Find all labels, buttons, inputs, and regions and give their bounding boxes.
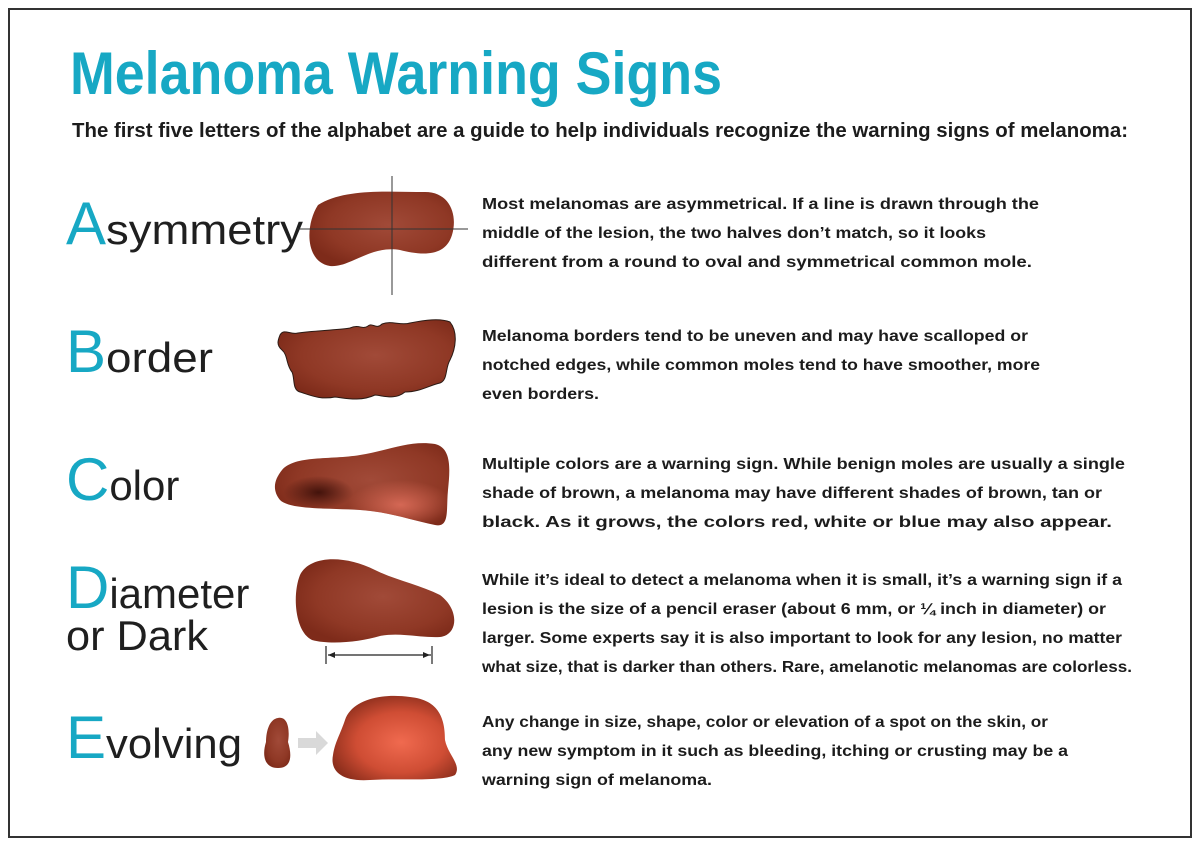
text B: even borders. bbox=[482, 386, 599, 403]
text B bbox=[482, 328, 1040, 403]
heading: Color: Color bbox=[66, 446, 179, 513]
text A: Most melanomas are asymmetrical. If a line is drawn through the bbox=[482, 196, 1039, 213]
icon: asymmetric mole with crosshair bbox=[297, 176, 468, 295]
row B: Border bbox=[66, 318, 1040, 403]
icon: mole with uneven border bbox=[278, 320, 455, 399]
text A: middle of the lesion, the two halves don’t match, so it looks bbox=[482, 225, 986, 242]
text D bbox=[481, 572, 1132, 676]
text D: While it’s ideal to detect a melanoma when it is small, it’s a warning sign if a bbox=[482, 572, 1122, 589]
row D: Diameter or Dark bbox=[66, 554, 1132, 676]
heading: Asymmetry: Asymmetry bbox=[66, 190, 303, 257]
row D: Diameter or Dark: or Dark bbox=[66, 612, 209, 659]
row C: Color bbox=[66, 443, 1125, 531]
text E: warning sign of melanoma. bbox=[481, 772, 712, 789]
text E: Any change in size, shape, color or elevation of a spot on the skin, or bbox=[482, 714, 1048, 731]
text C bbox=[482, 456, 1125, 531]
text C: Multiple colors are a warning sign. While benign moles are usually a single bbox=[482, 456, 1125, 473]
row E: Evolving bbox=[66, 696, 1068, 789]
title: Melanoma Warning Signs bbox=[70, 40, 722, 107]
icon: multicolored mole bbox=[275, 443, 449, 525]
text D: larger. Some experts say it is also important to look for any lesion, no matter bbox=[482, 630, 1122, 647]
text C: shade of brown, a melanoma may have different shades of brown, tan or bbox=[482, 485, 1102, 502]
text A: different from a round to oval and symmetrical common mole. bbox=[482, 254, 1032, 271]
icon: mole with diameter measure bbox=[296, 559, 454, 664]
text B: notched edges, while common moles tend to have smoother, more bbox=[482, 357, 1040, 374]
text C: black. As it grows, the colors red, white or blue may also appear. bbox=[482, 514, 1112, 531]
text A bbox=[482, 196, 1039, 271]
text B: Melanoma borders tend to be uneven and may have scalloped or bbox=[482, 328, 1028, 345]
heading: Evolving: Evolving bbox=[66, 704, 242, 771]
text D: lesion is the size of a pencil eraser (about 6 mm, or ¼ inch in diameter) or bbox=[482, 601, 1106, 618]
text D: what size, that is darker than others. Rare, amelanotic melanomas are colorless. bbox=[481, 659, 1132, 676]
icon: small mole growing into large mole bbox=[264, 696, 457, 780]
subtitle: The first five letters of the alphabet are a guide to help individuals recognize the warning signs of melanoma: bbox=[72, 120, 1128, 142]
heading: Diameter or Dark: Diameter bbox=[66, 554, 249, 621]
text E: any new symptom in it such as bleeding, itching or crusting may be a bbox=[482, 743, 1068, 760]
heading: Border: Border bbox=[66, 318, 213, 385]
text E bbox=[481, 714, 1068, 789]
row A: Asymmetry bbox=[66, 176, 1039, 295]
